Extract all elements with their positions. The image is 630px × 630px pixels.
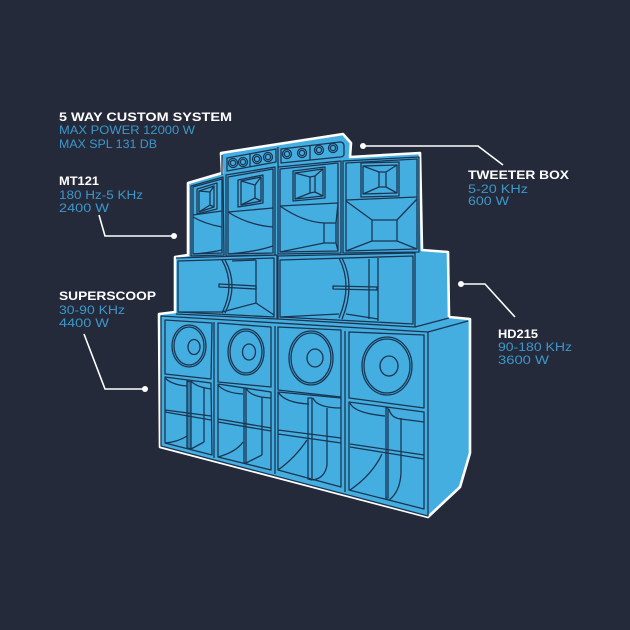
callout: MT121: [59, 176, 177, 239]
callout: HD215: 3600 W: [498, 355, 549, 367]
speaker stack illustration: [159, 134, 470, 517]
callout: Tweeter box: 5-20 KHz: [468, 184, 528, 196]
callout: MT121: 2400 W: [59, 203, 109, 215]
callout: Tweeter box: TWEETER BOX: [468, 170, 569, 182]
callout: Tweeter box: 600 W: [468, 196, 509, 208]
callout: MT121: 180 Hz-5 KHz: [59, 190, 143, 202]
cabinet 2: [218, 323, 271, 470]
callout: HD215: 90-180 KHz: [498, 342, 572, 354]
callout: Superscoop: SUPERSCOOP: [59, 291, 156, 303]
MT121 top cabinets: [191, 157, 419, 256]
callout: HD215: [458, 281, 572, 367]
callout: system header: 5 WAY CUSTOM SYSTEM: [59, 112, 232, 124]
Superscoop bottom cabinets: [161, 316, 468, 516]
callout: system header: MAX SPL 131 DB: [59, 139, 157, 151]
callout: system header: MAX POWER 12000 W: [59, 125, 195, 137]
cabinet 4: [349, 332, 424, 509]
callout: system header: [59, 112, 232, 151]
stack silhouette: [159, 134, 470, 517]
callout: MT121: MT121: [59, 176, 100, 188]
cabinet 1: [165, 320, 212, 455]
callout: Superscoop: 4400 W: [59, 318, 109, 330]
tweeter boxes: [222, 142, 344, 175]
cabinet 3: [278, 327, 341, 487]
callout: Superscoop: 30-90 KHz: [59, 305, 125, 317]
callout: HD215: HD215: [498, 329, 539, 341]
callout: Tweeter box: [360, 143, 569, 208]
callout: Superscoop: [59, 291, 156, 392]
HD215 middle cabinets: [176, 253, 449, 327]
